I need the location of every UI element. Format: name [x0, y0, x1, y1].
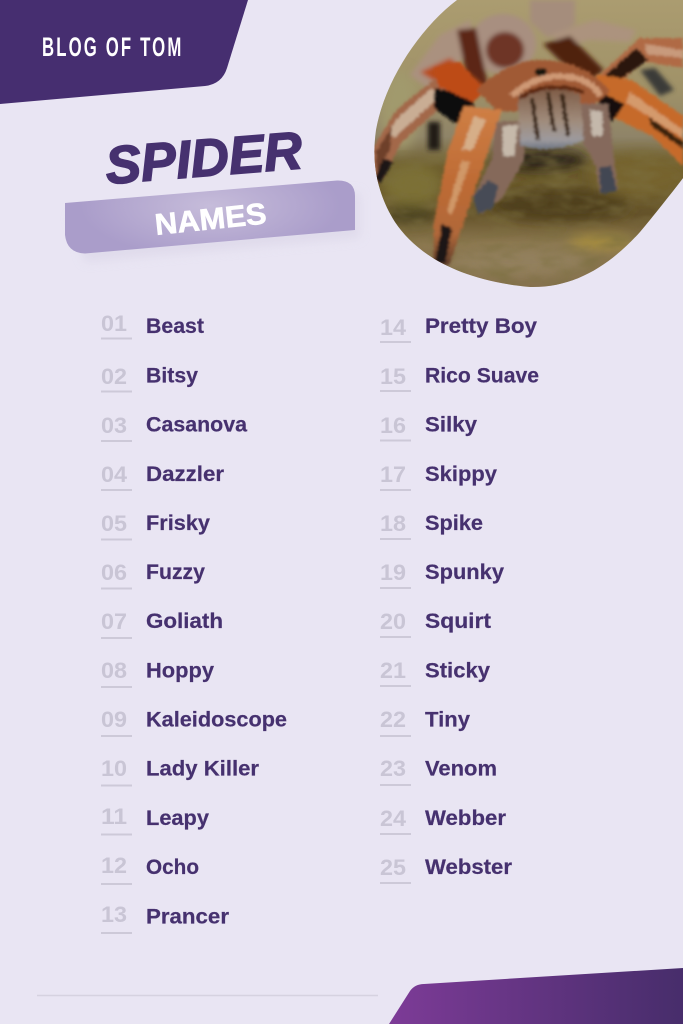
item 04 — [101, 462, 224, 490]
item 18: 18 — [380, 511, 406, 536]
item 17: 17 — [380, 462, 406, 487]
item 12: 12 — [101, 853, 127, 878]
title — [65, 121, 360, 262]
item 25 — [380, 855, 512, 883]
item 08: 08 — [101, 658, 127, 683]
item 01: 01 — [101, 311, 127, 336]
left pedipalp — [473, 120, 526, 214]
item 15: Rico Suave — [425, 364, 539, 388]
item 16 — [380, 413, 477, 440]
subtitle bar — [65, 180, 355, 254]
item 14: 14 — [380, 315, 407, 340]
spider body and legs with furry edges — [372, 38, 683, 266]
left leg — [372, 62, 484, 186]
item 01: Beast — [146, 315, 204, 338]
brand name: BLOG OF TOM — [42, 32, 183, 62]
item 07: Goliath — [146, 610, 223, 633]
item 20: 20 — [380, 609, 406, 634]
item 09 — [101, 707, 287, 736]
item 09: Kaleidoscope — [146, 708, 287, 732]
item 22 — [380, 707, 470, 736]
item 24 — [380, 806, 506, 834]
item 03 — [101, 413, 247, 441]
item 19: Spunky — [425, 561, 504, 584]
item 01 — [101, 311, 204, 338]
item 05 — [101, 511, 210, 540]
item 19: 19 — [380, 560, 406, 585]
item 11 — [101, 804, 209, 834]
item 14: Pretty Boy — [425, 315, 537, 338]
item 05: Frisky — [146, 512, 210, 535]
item 11: Leapy — [146, 807, 209, 830]
blurred back legs and abdomen — [410, 0, 674, 150]
item 19 — [380, 560, 504, 588]
item 23: 23 — [380, 756, 406, 781]
item 24: 24 — [380, 806, 407, 831]
item 17 — [380, 462, 497, 490]
subtitle bar shadow — [70, 192, 360, 262]
item 20 — [380, 609, 491, 637]
item 13 — [101, 902, 229, 933]
item 23: Venom — [425, 758, 497, 780]
item 05: 05 — [101, 511, 127, 536]
carapace — [476, 60, 610, 112]
item 22: 22 — [380, 707, 406, 732]
item 02: 02 — [101, 364, 127, 389]
front left leg — [433, 106, 502, 266]
names list: column 2 — [380, 315, 539, 883]
title word: spider: SPIDER — [103, 121, 304, 196]
item 16: 16 — [380, 413, 406, 438]
item 20: Squirt — [425, 610, 491, 633]
item 14 — [380, 315, 537, 342]
right leg — [596, 74, 683, 166]
item 13: 13 — [101, 902, 127, 927]
right pedipalp — [581, 104, 618, 194]
item 12 — [101, 853, 199, 884]
item 22: Tiny — [425, 708, 470, 732]
item 10: 10 — [101, 756, 127, 781]
item 16: Silky — [425, 414, 477, 436]
photo: tarantula — [370, 0, 683, 290]
item 06: 06 — [101, 560, 127, 585]
item 25: Webster — [425, 856, 512, 879]
item 17: Skippy — [425, 463, 497, 486]
item 15: 15 — [380, 364, 406, 389]
names list: column 1 — [101, 311, 287, 933]
footer banner — [389, 968, 683, 1024]
item 18: Spike — [425, 512, 483, 535]
item 03: 03 — [101, 413, 127, 438]
item 12: Ocho — [146, 856, 199, 879]
subtitle word: names: NAMES — [153, 197, 268, 242]
item 06 — [101, 560, 205, 588]
spider face — [512, 68, 600, 149]
item 24: Webber — [425, 807, 506, 830]
item 25: 25 — [380, 855, 406, 880]
item 08: Hoppy — [146, 660, 214, 682]
item 09: 09 — [101, 707, 127, 732]
item 07: 07 — [101, 609, 127, 634]
item 15 — [380, 364, 539, 391]
item 02: Bitsy — [146, 364, 198, 388]
item 13: Prancer — [146, 906, 229, 928]
item 04: 04 — [101, 462, 128, 487]
item 23 — [380, 756, 497, 785]
item 21: Sticky — [425, 660, 490, 682]
item 11: 11 — [101, 804, 127, 829]
upper right leg — [600, 36, 683, 80]
ground tones — [380, 70, 683, 276]
item 21 — [380, 658, 490, 686]
item 07 — [101, 609, 223, 638]
item 03: Casanova — [146, 414, 247, 436]
item 18 — [380, 511, 483, 539]
item 02 — [101, 364, 198, 392]
item 06: Fuzzy — [146, 561, 205, 584]
header banner — [0, 0, 248, 104]
item 21: 21 — [380, 658, 406, 683]
item 10 — [101, 756, 259, 786]
item 08 — [101, 658, 214, 687]
item 04: Dazzler — [146, 463, 224, 486]
item 10: Lady Killer — [146, 758, 259, 780]
